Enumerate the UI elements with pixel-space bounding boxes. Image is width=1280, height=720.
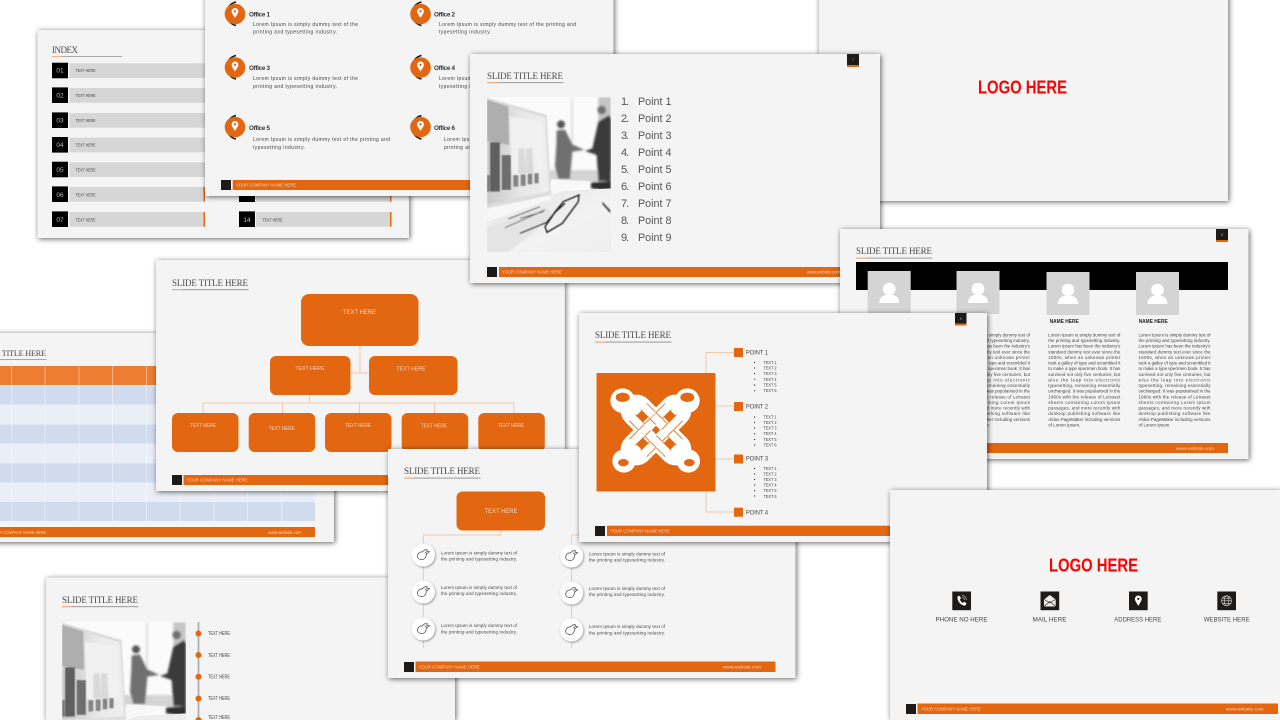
office 3: [225, 56, 358, 90]
point 1: TEXT 2: [764, 366, 777, 371]
office 6: Office 6: [434, 125, 455, 132]
contact: phone: [936, 592, 988, 624]
biography column 2: took a galley of type and scrambled it: [958, 361, 1031, 366]
numbered list: 7.: [621, 198, 629, 210]
biography column 2: [958, 332, 1031, 427]
heading: index: [52, 45, 122, 57]
contact: address: [1114, 592, 1161, 624]
black band: [856, 262, 1228, 290]
biography column 4: sheets containing Lorem Ipsum: [1138, 400, 1211, 405]
index rows: TEXT HERE: [262, 218, 283, 222]
biography column 3: Lorem Ipsum has been the industry's: [1048, 344, 1121, 349]
index rows: 04: [56, 142, 64, 149]
numbered list: 1.: [621, 96, 629, 108]
biography column 3: sheets containing Lorem Ipsum: [1048, 400, 1121, 405]
numbered list: 6.: [621, 181, 629, 193]
names: NAME HERE: [1050, 319, 1079, 325]
office 6: Lorem Ipsum is simply dummy text of the: [444, 137, 549, 143]
table: [0, 366, 315, 521]
office 2: Lorem Ipsum is simply dummy text of the printing and: [439, 22, 576, 28]
biography column 2: also the leap into electronic: [958, 378, 1031, 382]
panel: index slide: [38, 30, 409, 238]
point 1: TEXT 4: [764, 377, 777, 382]
timeline: TEXT HERE: [208, 674, 231, 680]
biography column 2: standard dummy text ever since the: [958, 349, 1031, 354]
page number: [1216, 229, 1228, 242]
point 1: TEXT 6: [764, 388, 777, 393]
point 2: TEXT 1: [764, 414, 777, 420]
point 2: [734, 402, 777, 448]
footer: offices slide: [221, 180, 593, 190]
flow items: the printing and typesetting industry.: [589, 592, 665, 597]
index rows: TEXT HERE: [76, 142, 96, 148]
panel: points and logo diagram slide: [579, 313, 987, 542]
point 2: TEXT 2: [764, 420, 777, 425]
heading: diagram title: SLIDE TITLE HERE: [595, 330, 672, 340]
index rows: TEXT HERE: [76, 192, 96, 198]
index rows: TEXT HERE: [76, 93, 96, 98]
biography column 3: standard dummy text ever since the: [1048, 349, 1121, 354]
contact: website: WEBSITE HERE: [1204, 617, 1250, 624]
index rows: TEXT HERE: [76, 68, 96, 73]
footer: org chart slide: YOUR COMPANY NAME HERE: [186, 478, 248, 484]
point 3: [734, 454, 777, 499]
index rows: 01: [56, 68, 64, 74]
biography column 3: took a galley of type and scrambled it: [1048, 361, 1121, 366]
biography column 4: 1500s, when an unknown printer: [1138, 355, 1211, 360]
footer: flow slide: www.website.com: [723, 664, 761, 670]
panel: offices slide: [205, 0, 614, 196]
flow items: Lorem Ipsum is simply dummy text of: [441, 623, 518, 628]
flow items: the printing and typesetting industry.: [589, 557, 665, 562]
office 1: Office 1: [249, 12, 270, 18]
biography column 4: of Lorem Ipsum.: [1138, 422, 1170, 427]
numbered list: [621, 96, 672, 244]
point 3: TEXT 4: [764, 483, 777, 488]
biography column 2: desktop publishing software like: [958, 411, 1031, 416]
page number: [955, 313, 966, 326]
footer: org chart slide: [172, 475, 544, 485]
office 3: Office 3: [249, 65, 270, 72]
index rows: TEXT HERE: [76, 168, 96, 172]
timeline: [196, 622, 231, 720]
numbered list: Point 9: [638, 232, 672, 244]
flow items: Lorem Ipsum is simply dummy text of: [441, 585, 518, 590]
contact: mail: [1032, 592, 1066, 624]
biography column 2: to make a type specimen book. It has: [958, 366, 1031, 371]
biography column 2: Lorem Ipsum has been the industry's: [958, 344, 1031, 349]
biography column 2: 1500s, when an unknown printer: [958, 355, 1031, 360]
numbered list: Point 2: [638, 113, 672, 125]
contact: website: [1204, 592, 1250, 624]
biography column 3: Aldus PageMaker including versions: [1048, 417, 1121, 422]
biography column 3: to make a type specimen book. It has: [1048, 366, 1121, 371]
index rows: 14: [243, 217, 251, 224]
panel: team slide: [840, 229, 1248, 459]
heading: points title: SLIDE TITLE HERE: [487, 71, 564, 81]
biography column 2: of Lorem Ipsum.: [958, 422, 990, 427]
biography column 3: desktop publishing software like: [1048, 411, 1121, 416]
flow items: the printing and typesetting industry.: [589, 630, 665, 635]
biography column 3: 1500s, when an unknown printer: [1048, 355, 1121, 360]
numbered list: 3.: [621, 130, 629, 142]
panel: photo timeline slide: [46, 578, 455, 720]
flow items: the printing and typesetting industry.: [441, 591, 517, 596]
office 2: typesetting industry.: [439, 30, 491, 36]
biography column 2: survived not only five centuries, but: [958, 372, 1031, 377]
biography column 3: of Lorem Ipsum.: [1048, 422, 1080, 427]
flow connectors: [423, 530, 600, 648]
biography column 4: also the leap into electronic: [1138, 378, 1211, 382]
index rows: 06: [56, 192, 64, 199]
office 1: printing and typesetting industry.: [253, 30, 337, 36]
office 4: typesetting industry.: [439, 84, 491, 90]
numbered list: Point 1: [638, 96, 672, 108]
point 2: TEXT 4: [764, 431, 777, 436]
page number: [847, 54, 859, 67]
office 2: Office 2: [434, 12, 455, 18]
logo placeholder: LOGO HERE: [1049, 556, 1138, 576]
numbered list: Point 5: [638, 164, 672, 176]
flow top box: TEXT HERE: [484, 508, 518, 515]
biography column 4: unchanged. It was popularised in the: [1138, 389, 1211, 394]
contact: address: ADDRESS HERE: [1114, 617, 1161, 624]
org chart boxes: TEXT HERE: [498, 423, 524, 429]
point 2: POINT 2: [746, 404, 769, 410]
point 3: TEXT 5: [764, 488, 777, 493]
numbered list: 8.: [621, 215, 629, 227]
footer: contact slide: YOUR COMPANY NAME HERE: [921, 706, 981, 712]
panel: table slide: [0, 333, 334, 542]
flow items: the printing and typesetting industry.: [441, 556, 517, 561]
diagram connectors: [706, 352, 734, 512]
office 5: Lorem Ipsum is simply dummy text of the printing and: [253, 137, 390, 143]
footer: points slide: YOUR COMPANY NAME HERE: [502, 270, 562, 276]
biography column 2: Lorem Ipsum is simply dummy text of: [958, 332, 1031, 338]
biography column 4: passages, and more recently with: [1138, 406, 1211, 411]
numbered list: Point 4: [638, 147, 672, 159]
footer: diagram slide: YOUR COMPANY NAME HERE: [610, 529, 670, 535]
heading: flow title: SLIDE TITLE HERE: [404, 466, 480, 476]
index rows: 07: [56, 217, 64, 224]
numbered list: Point 7: [638, 198, 672, 210]
biography column 4: 1960s with the release of Letraset: [1138, 394, 1211, 399]
biography column 4: survived not only five centuries, but: [1138, 372, 1211, 377]
numbered list: 9.: [621, 232, 629, 244]
contact: phone: PHONE NO HERE: [936, 617, 988, 624]
point 3: TEXT 6: [764, 494, 777, 499]
office 4: [410, 56, 576, 90]
footer: contact slide: www.website.com: [1226, 706, 1264, 712]
numbered list: 4.: [621, 147, 629, 159]
point 1: TEXT 5: [764, 382, 777, 387]
biography column 4: Lorem Ipsum has been the industry's: [1138, 344, 1211, 349]
biography column 2: Aldus PageMaker including versions: [958, 417, 1031, 422]
biography column 4: typesetting, remaining essentially: [1138, 383, 1211, 388]
org chart boxes: TEXT HERE: [190, 423, 216, 429]
photo: handshake: [62, 622, 186, 720]
numbered list: Point 8: [638, 215, 672, 227]
office 5: typesetting industry.: [253, 145, 305, 151]
heading: photo slide title: SLIDE TITLE HERE: [62, 595, 138, 605]
panel: contact slide: [890, 490, 1280, 720]
numbered list: 5.: [621, 164, 629, 176]
timeline: TEXT HERE: [208, 696, 231, 702]
numbered list: 2.: [621, 113, 629, 125]
biography column 2: typesetting, remaining essentially: [958, 383, 1031, 388]
biography column 3: the printing and typesetting industry.: [1048, 338, 1120, 343]
biography column 2: unchanged. It was popularised in the: [958, 389, 1031, 394]
flow items: Lorem Ipsum is simply dummy text of: [589, 586, 666, 591]
office 3: printing and typesetting industry.: [253, 84, 337, 90]
biography column 3: unchanged. It was popularised in the: [1048, 389, 1121, 394]
biography column 2: the printing and typesetting industry.: [958, 338, 1030, 343]
org chart boxes: TEXT HERE: [345, 423, 371, 429]
biography column 3: Lorem Ipsum is simply dummy text of: [1048, 332, 1121, 338]
footer: points slide: www.website.com: [807, 270, 840, 276]
biography column 2: sheets containing Lorem Ipsum: [958, 400, 1030, 405]
office 6: printing and typesetting industry.: [444, 145, 528, 151]
flow items: Lorem Ipsum is simply dummy text of: [589, 624, 666, 629]
index rows: 05: [56, 167, 64, 174]
names: [1050, 319, 1168, 325]
footer: flow slide: [404, 662, 776, 672]
index rows: TEXT HERE: [76, 218, 96, 222]
index rows: [52, 63, 392, 227]
footer: flow slide: YOUR COMPANY NAME HERE: [419, 664, 480, 670]
photo: handshake: [487, 97, 612, 252]
org connectors: [203, 346, 514, 413]
office 5: [225, 116, 390, 151]
office 2: [410, 2, 576, 36]
org chart boxes: TEXT HERE: [343, 309, 377, 316]
heading: team title: SLIDE TITLE HERE: [856, 246, 932, 256]
footer: team slide: [950, 443, 1228, 453]
footer: offices slide: YOUR COMPANY NAME HERE: [236, 182, 296, 188]
point 3: TEXT 2: [764, 472, 777, 476]
point 1: [734, 348, 777, 393]
index rows: TEXT HERE: [76, 118, 96, 123]
office 1: [225, 2, 358, 36]
panel: org chart slide: [156, 260, 565, 491]
office 4: Lorem Ipsum is simply dummy text of the printing and: [439, 76, 576, 82]
page number: 9: [960, 317, 962, 321]
flow items: Lorem Ipsum is simply dummy text of: [589, 551, 666, 556]
panel: process flow slide: [388, 449, 796, 678]
point 1: TEXT 1: [764, 360, 777, 365]
biography column 3: 1960s with the release of Letraset: [1048, 394, 1121, 399]
biography column 4: standard dummy text ever since the: [1138, 349, 1211, 354]
index rows: 02: [56, 92, 64, 100]
timeline: TEXT HERE: [208, 631, 231, 637]
point 4: POINT 4: [746, 510, 769, 516]
point 3: TEXT 3: [764, 477, 777, 482]
numbered list: Point 6: [638, 181, 672, 193]
logo placeholder: LOGO HERE: [978, 78, 1067, 98]
org chart boxes: TEXT HERE: [421, 424, 447, 430]
point 4: [734, 508, 769, 517]
contact: mail: MAIL HERE: [1032, 617, 1066, 624]
org chart boxes: [172, 294, 545, 452]
biography column 3: also the leap into electronic: [1048, 378, 1121, 382]
page number: 7: [852, 58, 854, 62]
office 5: Office 5: [249, 125, 270, 132]
names: NAME HERE: [1139, 319, 1168, 325]
biography column 2: 1960s with the release of Letraset: [958, 394, 1031, 399]
biography column 3: survived not only five centuries, but: [1048, 372, 1121, 377]
biography column 4: Lorem Ipsum is simply dummy text of: [1138, 332, 1211, 338]
office 6: [410, 116, 549, 151]
point 2: TEXT 5: [764, 437, 777, 442]
panel: points list slide: [470, 54, 880, 283]
biography column 2: passages, and more recently with: [958, 406, 1031, 411]
index rows: 03: [56, 118, 64, 124]
icon: interlocked logo: [596, 373, 716, 492]
page number: 8: [1221, 233, 1223, 237]
biography column 4: Aldus PageMaker including versions: [1138, 417, 1211, 422]
flow items: Lorem Ipsum is simply dummy text of: [441, 550, 518, 555]
org chart boxes: TEXT HERE: [396, 366, 426, 372]
org chart boxes: TEXT HERE: [269, 426, 295, 432]
heading: org chart title: SLIDE TITLE HERE: [172, 278, 248, 288]
numbered list: Point 3: [638, 130, 672, 142]
panel: logo slide: [819, 0, 1228, 201]
team portraits: [868, 271, 1179, 315]
biography column 4: [1138, 332, 1211, 427]
footer: diagram slide: [595, 526, 968, 536]
biography column 3: passages, and more recently with: [1048, 406, 1121, 411]
footer: team slide: www.website.com: [1176, 446, 1214, 452]
heading: index: INDEX: [52, 45, 78, 55]
biography column 4: the printing and typesetting industry.: [1138, 338, 1210, 343]
footer: contact slide: [906, 704, 1278, 714]
footer: table slide: [0, 527, 315, 537]
biography column 4: to make a type specimen book. It has: [1138, 366, 1211, 371]
office 4: Office 4: [434, 65, 455, 72]
point 3: TEXT 1: [764, 466, 777, 471]
flow top box: [456, 492, 545, 530]
point 1: POINT 1: [746, 351, 769, 357]
biography column 3: [1048, 332, 1121, 427]
flow items: [412, 544, 666, 642]
biography column 3: typesetting, remaining essentially: [1048, 383, 1121, 388]
point 2: TEXT 3: [764, 426, 777, 430]
biography column 4: took a galley of type and scrambled it: [1138, 361, 1211, 366]
point 3: POINT 3: [746, 456, 769, 462]
point 2: TEXT 6: [764, 442, 777, 448]
org chart boxes: TEXT HERE: [296, 366, 325, 372]
timeline: TEXT HERE: [208, 653, 231, 659]
office 1: Lorem Ipsum is simply dummy text of the: [253, 22, 358, 28]
flow items: the printing and typesetting industry.: [441, 629, 517, 634]
point 1: TEXT 3: [764, 371, 777, 376]
footer: points slide: [487, 267, 860, 277]
footer: table slide: www.website.com: [268, 530, 302, 536]
office 3: Lorem Ipsum is simply dummy text of the: [253, 76, 358, 82]
biography column 4: desktop publishing software like: [1138, 411, 1211, 416]
